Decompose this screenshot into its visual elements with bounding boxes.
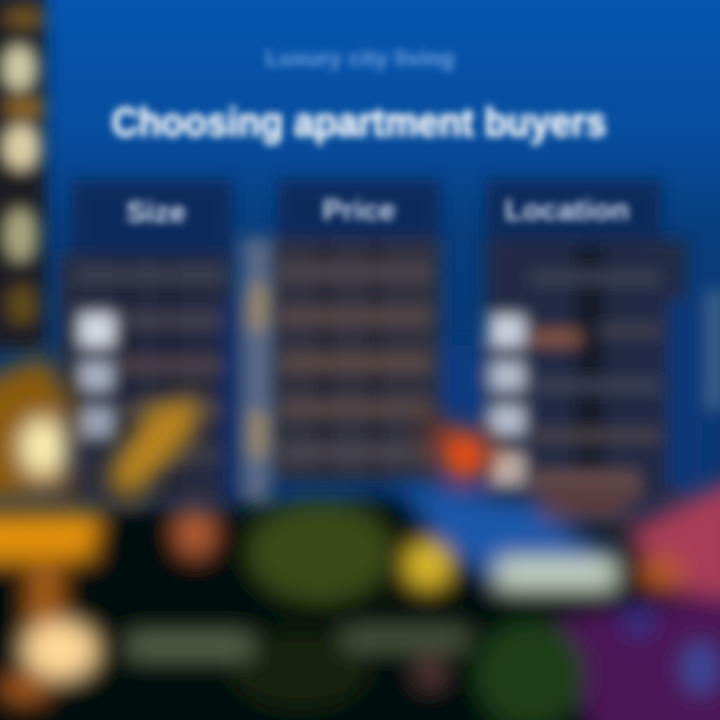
- left tower with lights: [0, 0, 45, 350]
- panel heading: left: Size: [126, 196, 186, 229]
- subtitle: Luxury city living: [265, 45, 455, 71]
- buildings layer: [0, 0, 720, 515]
- foreground dark base: [0, 500, 720, 720]
- magenta street lights: [540, 475, 720, 720]
- title: Choosing apartment buyers: [112, 99, 606, 145]
- text layer: [112, 45, 630, 229]
- golden lamp ornament: [0, 355, 200, 702]
- building panel: center: [272, 180, 440, 480]
- blue plaza area: [400, 485, 610, 580]
- building panel: right: [486, 180, 720, 510]
- panel heading: right: Location: [504, 194, 630, 227]
- panel heading: center: Price: [322, 194, 396, 227]
- palm foliage: [175, 502, 585, 720]
- light column between panels: [222, 238, 483, 515]
- pale bars: [128, 558, 615, 658]
- building panel: left: [60, 180, 232, 505]
- foreground layer: [0, 355, 720, 720]
- orange glow: [439, 429, 491, 481]
